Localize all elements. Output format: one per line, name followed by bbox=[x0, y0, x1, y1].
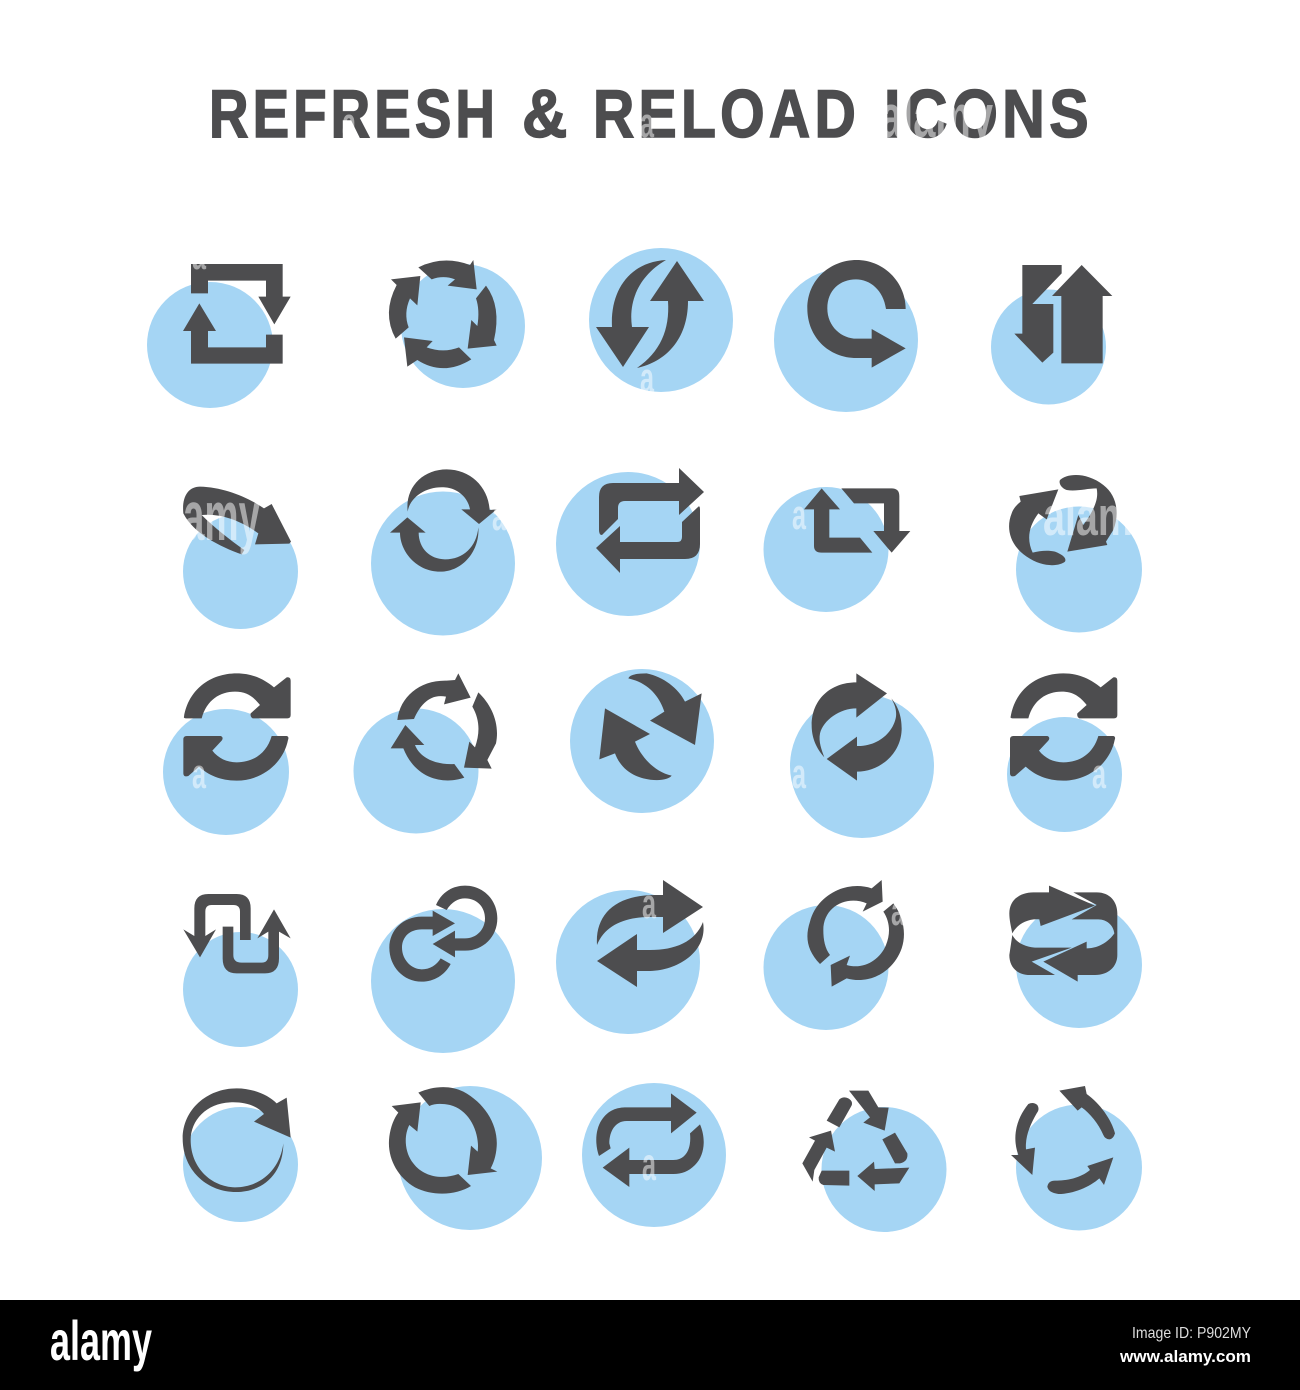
icon: rounded loop arrows bbox=[582, 1083, 726, 1227]
icon: two arc arrows circle bbox=[371, 469, 515, 636]
icon: thin circular arrows bbox=[764, 880, 905, 1030]
title: a bbox=[640, 99, 654, 146]
icon: rounded block exchange arrows bbox=[1009, 886, 1142, 1028]
icon: retweet arrows: a bbox=[792, 491, 806, 538]
icon: U turn arrows bbox=[183, 894, 298, 1047]
icon: square repeat arrows bbox=[147, 231, 291, 408]
icon: down and up block arrows bbox=[991, 265, 1112, 404]
icon: three thin arrows circle bbox=[1011, 1086, 1142, 1230]
title: a bbox=[342, 99, 356, 146]
icon: diagonal swap arrows bbox=[570, 669, 714, 813]
icon: up and down swoosh arrows: a bbox=[640, 354, 654, 401]
footer bar bbox=[0, 1300, 1300, 1390]
icon: retweet arrows bbox=[764, 487, 910, 612]
icon: circular swoosh arrows: a bbox=[792, 750, 806, 797]
icon: C shaped redo arrow bbox=[774, 260, 918, 412]
icon: bold two arrow circle bbox=[389, 1086, 542, 1230]
icon: sync arrows bold right bbox=[1007, 673, 1122, 832]
icon: single circle arrow bbox=[183, 1088, 298, 1222]
icon: sync arrows bold right: a bbox=[1092, 750, 1106, 797]
title: alamy bbox=[880, 83, 993, 150]
icon: two arc arrows circle: a bbox=[492, 492, 506, 539]
icon: slanted twin arrows bbox=[1009, 475, 1142, 632]
image id: Image ID: P902MY bbox=[1132, 1325, 1251, 1342]
icon: sync arrows bold bbox=[163, 673, 291, 835]
icon: thin circular arrows: a bbox=[891, 887, 905, 934]
icon: square repeat arrows: a bbox=[192, 231, 206, 278]
footer logo: alamy bbox=[50, 1309, 152, 1372]
icon: flat loop arrow: amy bbox=[183, 477, 260, 555]
icon: three arrow circle bbox=[354, 673, 497, 834]
icon: up and down swoosh arrows bbox=[589, 248, 733, 401]
icon: recycle triangle arrows bbox=[802, 1091, 946, 1232]
title: REFRESH bbox=[209, 76, 499, 152]
icon: circular swoosh arrows bbox=[790, 673, 934, 838]
icon: slanted twin arrows: alam bbox=[1043, 485, 1133, 547]
title bbox=[209, 76, 1093, 152]
website: www.alamy.com bbox=[1119, 1347, 1251, 1366]
title: ICONS bbox=[884, 76, 1093, 152]
icon: infinity loop arrows bbox=[371, 886, 515, 1053]
icon: sync arrows bold: a bbox=[192, 750, 206, 797]
icon: rounded loop arrows: a bbox=[642, 1138, 656, 1190]
title: & bbox=[522, 76, 572, 152]
title: RELOAD bbox=[593, 76, 860, 152]
icon: flat loop arrow bbox=[183, 477, 298, 629]
icon: four arrow circle bbox=[389, 260, 525, 388]
icon: curved exchange arrows: a bbox=[642, 880, 656, 927]
icon: curved exchange arrows bbox=[556, 880, 704, 1034]
icon: rounded repeat arrows bbox=[556, 468, 704, 616]
